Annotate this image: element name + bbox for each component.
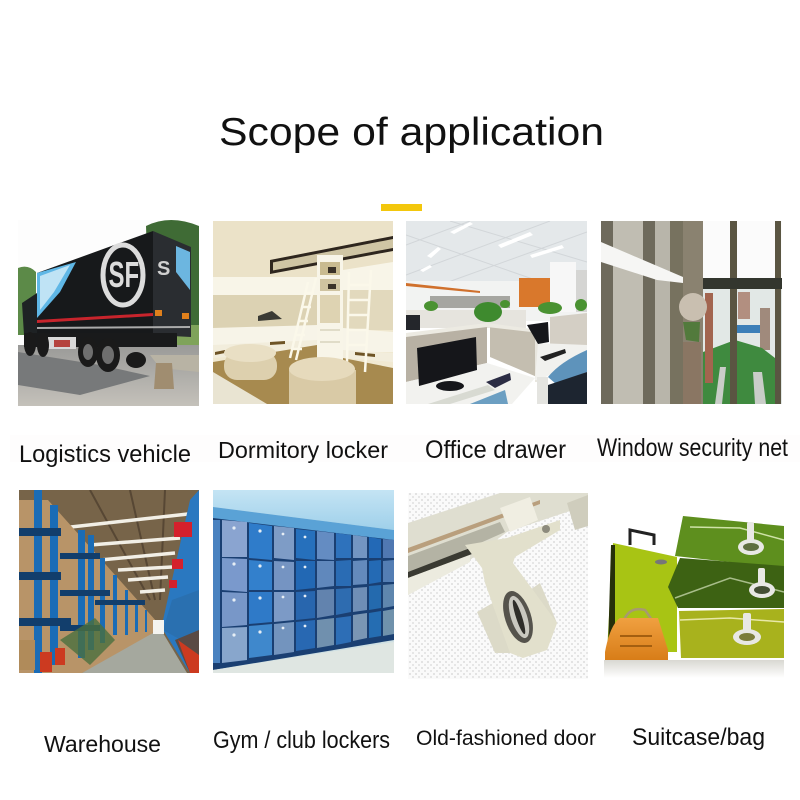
- caption: Dormitory locker: Dormitory locker: [218, 437, 388, 463]
- photo: gym lockers: [213, 490, 394, 673]
- yellow accent bar: [381, 204, 422, 211]
- cargo box: S: [157, 258, 170, 280]
- caption: Warehouse: Warehouse: [44, 731, 161, 757]
- photo: warehouse: [19, 490, 199, 673]
- photo: window security net: [601, 221, 782, 404]
- cargo box: SF: [108, 255, 139, 295]
- photo: old-fashioned door latch: [408, 493, 588, 679]
- hasp: [465, 520, 560, 658]
- orange bag: [605, 609, 668, 660]
- stacked cases: [668, 516, 784, 658]
- photo: logistics truck: [18, 220, 199, 406]
- chassis and wheels: [22, 293, 177, 372]
- photo: suitcases: [604, 510, 784, 678]
- caption: Suitcase/bag: Suitcase/bag: [632, 724, 765, 751]
- faint label band: [10, 435, 800, 462]
- caption: Old-fashioned door: Old-fashioned door: [416, 727, 596, 750]
- photo: dormitory bunks: [213, 221, 393, 410]
- cargo box: [37, 231, 191, 337]
- title: Scope of application: [219, 111, 604, 154]
- photo: office: [406, 221, 587, 404]
- caption: Office drawer: Office drawer: [425, 436, 566, 464]
- monitor: [417, 337, 477, 386]
- caption: Gym / club lockers: Gym / club lockers: [213, 727, 390, 754]
- caption: Logistics vehicle: Logistics vehicle: [19, 441, 191, 468]
